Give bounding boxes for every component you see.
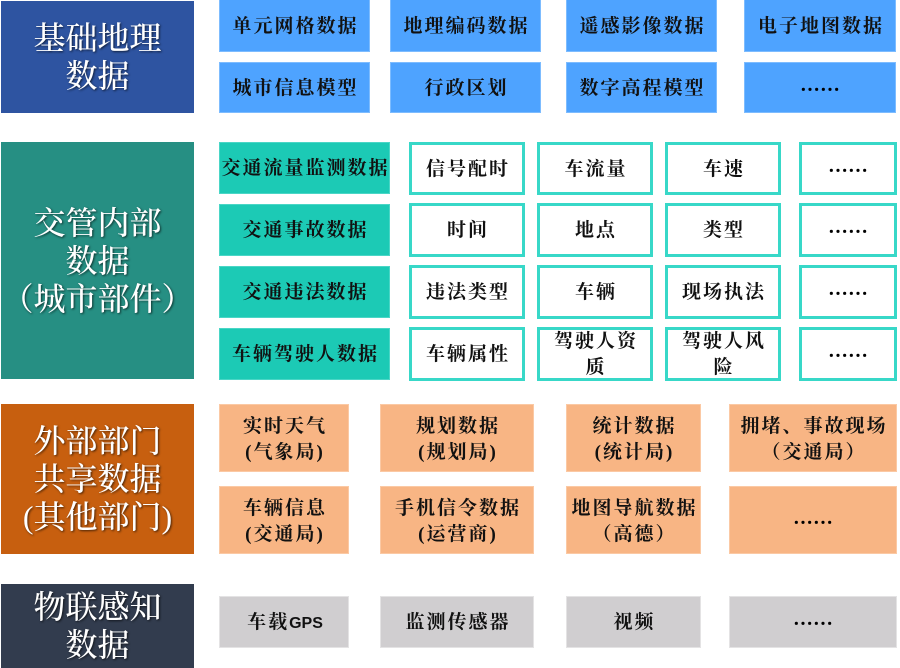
tile: 统计数据（统计局） [566,404,701,472]
tile: 规划数据（规划局）: 规划数据 [416,416,500,437]
tile: blue ellipsis [744,62,896,113]
heading: 外部部门共享数据（其他部门）: (其他部门) [23,499,172,535]
tile: 车辆信息（交通局） [219,486,349,554]
cell: 地点: 地点 [575,220,617,241]
cell: ellipsis row 2 [799,203,897,257]
cell: 驾驶人资质: 质 [585,357,606,378]
tile: 交通事故数据 [219,204,390,256]
tile: 手机信令数据（运营商）: 手机信令数据 [395,498,521,519]
cell: 车辆 [537,265,653,319]
tile: 车辆信息（交通局）: 车辆信息 [243,498,327,519]
tile: 行政区划: 行政区划 [424,78,508,98]
tile: 地图导航数据（高德）: （高德） [592,524,676,545]
cell: ellipsis row 3: …… [828,278,868,307]
tile: 遥感影像数据 [566,0,717,52]
tile: 视频: 视频 [613,612,656,633]
tile: 城市信息模型: 城市信息模型 [232,78,358,98]
cell: 驾驶人资质 [537,327,653,381]
cell: 车辆属性: 车辆属性 [426,344,510,365]
tile: 拥堵、事故现场（交通局）: （交通局） [761,442,866,463]
tile: 电子地图数据 [744,0,896,52]
cell: ellipsis row 4: …… [828,340,868,369]
tile: 手机信令数据（运营商）: (运营商) [418,524,498,545]
tile: 实时天气（气象局）: 实时天气 [243,416,327,437]
tile: 车辆信息（交通局）: (交通局) [245,524,325,545]
tile: 车辆驾驶人数据: 车辆驾驶人数据 [232,344,379,365]
cell: 类型 [665,203,781,257]
cell: 车流量 [537,142,653,195]
tile: 实时天气（气象局）: (气象局) [245,442,325,463]
cell: ellipsis row 1: …… [828,154,868,184]
cell: 车流量: 车流量 [564,158,628,180]
tile: 交通事故数据: 交通事故数据 [242,220,368,241]
tile: blue ellipsis: …… [800,74,840,102]
heading: 交管内部数据（城市部件）: 数据 [65,242,130,278]
tile: 手机信令数据（运营商） [380,486,534,554]
tile: 监测传感器 [380,596,534,648]
heading: 物联感知数据: 物联感知 [33,589,162,625]
tile: 交通流量监测数据 [219,142,390,194]
tile: 遥感影像数据: 遥感影像数据 [579,16,706,36]
tile: 拥堵、事故现场（交通局）: 拥堵、事故现场 [740,416,888,437]
tile: 数字高程模型: 数字高程模型 [579,78,706,98]
cell: 违法类型: 违法类型 [426,282,510,303]
tile: 交通违法数据: 交通违法数据 [242,282,368,303]
tile: 实时天气（气象局） [219,404,349,472]
cell: 驾驶人风险 [665,327,781,381]
tile: 车载GPS: 车载GPS [247,612,323,632]
tile: 拥堵、事故现场（交通局） [729,404,897,472]
heading: 基础地理数据: 数据 [65,58,130,94]
tile: gray ellipsis: …… [793,608,833,637]
heading: 基础地理数据: 基础地理 [33,20,162,56]
cell: 时间: 时间 [447,220,489,241]
tile: 电子地图数据: 电子地图数据 [758,16,884,36]
heading: 交管内部数据（城市部件）: （城市部件） [1,280,194,316]
tile: 交通违法数据 [219,266,390,318]
tile: 车辆驾驶人数据 [219,328,390,380]
tile: 规划数据（规划局）: (规划局) [418,442,498,463]
cell: 车速 [665,142,781,195]
tile: 地图导航数据（高德）: 地图导航数据 [571,498,698,519]
tile: 交通流量监测数据: 交通流量监测数据 [221,158,390,179]
cell: 现场执法: 现场执法 [682,282,766,303]
tile: 行政区划 [390,62,541,113]
heading: 外部部门共享数据（其他部门）: 外部部门 [33,423,162,459]
tile: 规划数据（规划局） [380,404,534,472]
cell: 车辆属性 [409,327,525,381]
cell: ellipsis row 4 [799,327,897,381]
cell: 违法类型 [409,265,525,319]
heading: 外部部门共享数据（其他部门）: 共享数据 [33,461,162,497]
tile: 单元网格数据 [219,0,370,52]
cell: 驾驶人资质: 驾驶人资 [554,331,638,352]
tile: 地图导航数据（高德） [566,486,701,554]
cell: 车速: 车速 [703,158,745,180]
cell: ellipsis row 2: …… [828,216,868,245]
tile: 车载GPS [219,596,349,648]
heading: 物联感知数据 [1,584,194,668]
cell: 驾驶人风险: 险 [713,357,734,378]
heading: 物联感知数据: 数据 [65,627,130,663]
cell: 类型: 类型 [703,220,745,241]
heading: 交管内部数据（城市部件） [1,142,194,379]
tile: orange ellipsis: …… [793,507,833,536]
tile: 地理编码数据: 地理编码数据 [403,16,530,36]
cell: 时间 [409,203,525,257]
heading: 外部部门共享数据（其他部门） [1,404,194,554]
cell: 车辆: 车辆 [575,282,617,303]
tile: 数字高程模型 [566,62,717,113]
tile: 视频 [566,596,701,648]
cell: 信号配时: 信号配时 [426,158,510,180]
tile: 统计数据（统计局）: 统计数据 [592,416,676,437]
cell: 现场执法 [665,265,781,319]
cell: ellipsis row 1 [799,142,897,195]
cell: 驾驶人风险: 驾驶人风 [682,331,766,352]
cell: ellipsis row 3 [799,265,897,319]
tile: 统计数据（统计局）: (统计局) [595,442,674,463]
tile: 地理编码数据 [390,0,541,52]
tile: 城市信息模型 [219,62,370,113]
tile: orange ellipsis [729,486,897,554]
heading: 交管内部数据（城市部件）: 交管内部 [33,204,162,240]
tile: 监测传感器: 监测传感器 [405,612,510,633]
cell: 地点 [537,203,653,257]
cell: 信号配时 [409,142,525,195]
heading: 基础地理数据 [1,1,194,113]
tile: gray ellipsis [729,596,897,648]
tile: 单元网格数据: 单元网格数据 [232,16,358,36]
